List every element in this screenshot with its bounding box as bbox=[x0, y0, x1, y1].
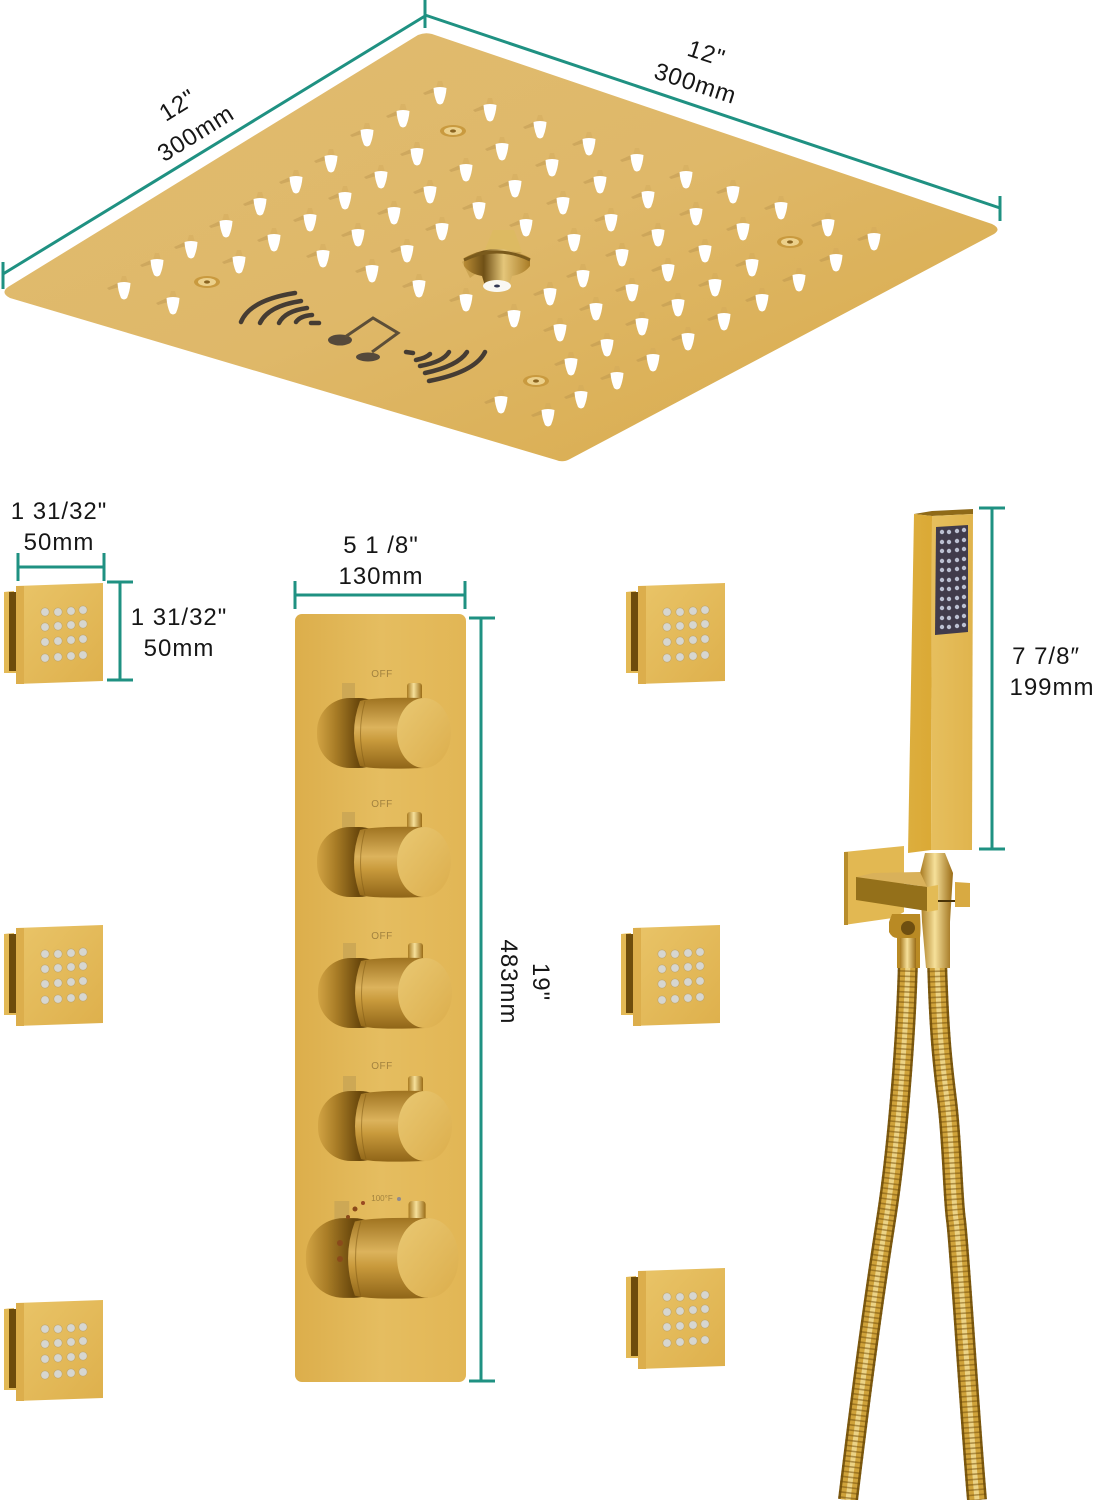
center light fixture bbox=[462, 230, 530, 292]
label: 12 inch 300mm: 12" bbox=[155, 84, 201, 127]
knob 4 bbox=[318, 1061, 452, 1162]
label: handle length: 199mm bbox=[1009, 674, 1095, 701]
knob 2: OFF bbox=[371, 799, 393, 810]
label: panel height bbox=[495, 939, 554, 1025]
hand shower bbox=[844, 509, 977, 1500]
knob 3 bbox=[318, 931, 452, 1029]
knob 1 bbox=[317, 669, 451, 769]
body jet middle right bbox=[621, 925, 720, 1026]
label: panel width bbox=[338, 532, 424, 590]
label: handle length: 7 7/8″ bbox=[1012, 643, 1080, 670]
label: 12 inch 300mm: 300mm bbox=[153, 100, 239, 168]
nozzle grid bbox=[107, 81, 880, 426]
thermostat knob bbox=[306, 1194, 459, 1299]
body jet bottom right bbox=[626, 1268, 725, 1369]
mounting screws bbox=[194, 125, 803, 387]
label: jet height: 1 31/32" bbox=[131, 604, 227, 631]
icon: left speaker waves bbox=[241, 293, 319, 323]
label: jet width bbox=[11, 498, 107, 556]
dimension: panel height bbox=[469, 618, 554, 1381]
knob 2 bbox=[317, 799, 451, 898]
label: 12 inch 300mm right: 12" bbox=[684, 35, 729, 73]
label: jet width: 1 31/32" bbox=[11, 498, 107, 525]
body jet top left bbox=[4, 583, 103, 684]
rain shower head panel bbox=[4, 33, 998, 461]
valve panel bbox=[295, 614, 466, 1382]
spray face bbox=[935, 525, 968, 635]
handle head bbox=[908, 509, 973, 853]
dimension: panel width bbox=[295, 532, 465, 609]
body jet bottom left bbox=[4, 1300, 103, 1401]
knob 3: OFF bbox=[371, 931, 393, 942]
label: panel width: 5 1 /8" bbox=[343, 532, 419, 559]
body jet middle left bbox=[4, 925, 103, 1026]
label: panel height: 19" bbox=[527, 963, 554, 1001]
label: jet height: 50mm bbox=[144, 635, 214, 662]
knob 1: OFF bbox=[371, 669, 393, 680]
label: 12 inch 300mm right bbox=[651, 35, 740, 110]
label: 12 inch 300mm right: 300mm bbox=[651, 58, 740, 110]
label: handle length bbox=[1009, 643, 1095, 701]
dimension: jet width bbox=[11, 498, 107, 581]
knob 4: OFF bbox=[371, 1061, 393, 1072]
dimension: head right side bbox=[425, 15, 1000, 221]
label: jet height bbox=[131, 604, 227, 662]
dimension: handle length bbox=[979, 508, 1095, 849]
label: jet width: 50mm bbox=[24, 529, 94, 556]
label: panel width: 130mm bbox=[338, 563, 424, 590]
dimension: jet height bbox=[107, 582, 227, 680]
thermostat knob: 100°F bbox=[371, 1194, 393, 1203]
hoses bbox=[848, 960, 977, 1500]
wall bracket bbox=[844, 846, 970, 968]
icon: right speaker waves bbox=[406, 352, 485, 381]
body jet top right bbox=[626, 583, 725, 684]
dimension: head left side bbox=[3, 0, 425, 289]
icon: music note bbox=[328, 318, 398, 362]
label: panel height: 483mm bbox=[495, 939, 522, 1025]
